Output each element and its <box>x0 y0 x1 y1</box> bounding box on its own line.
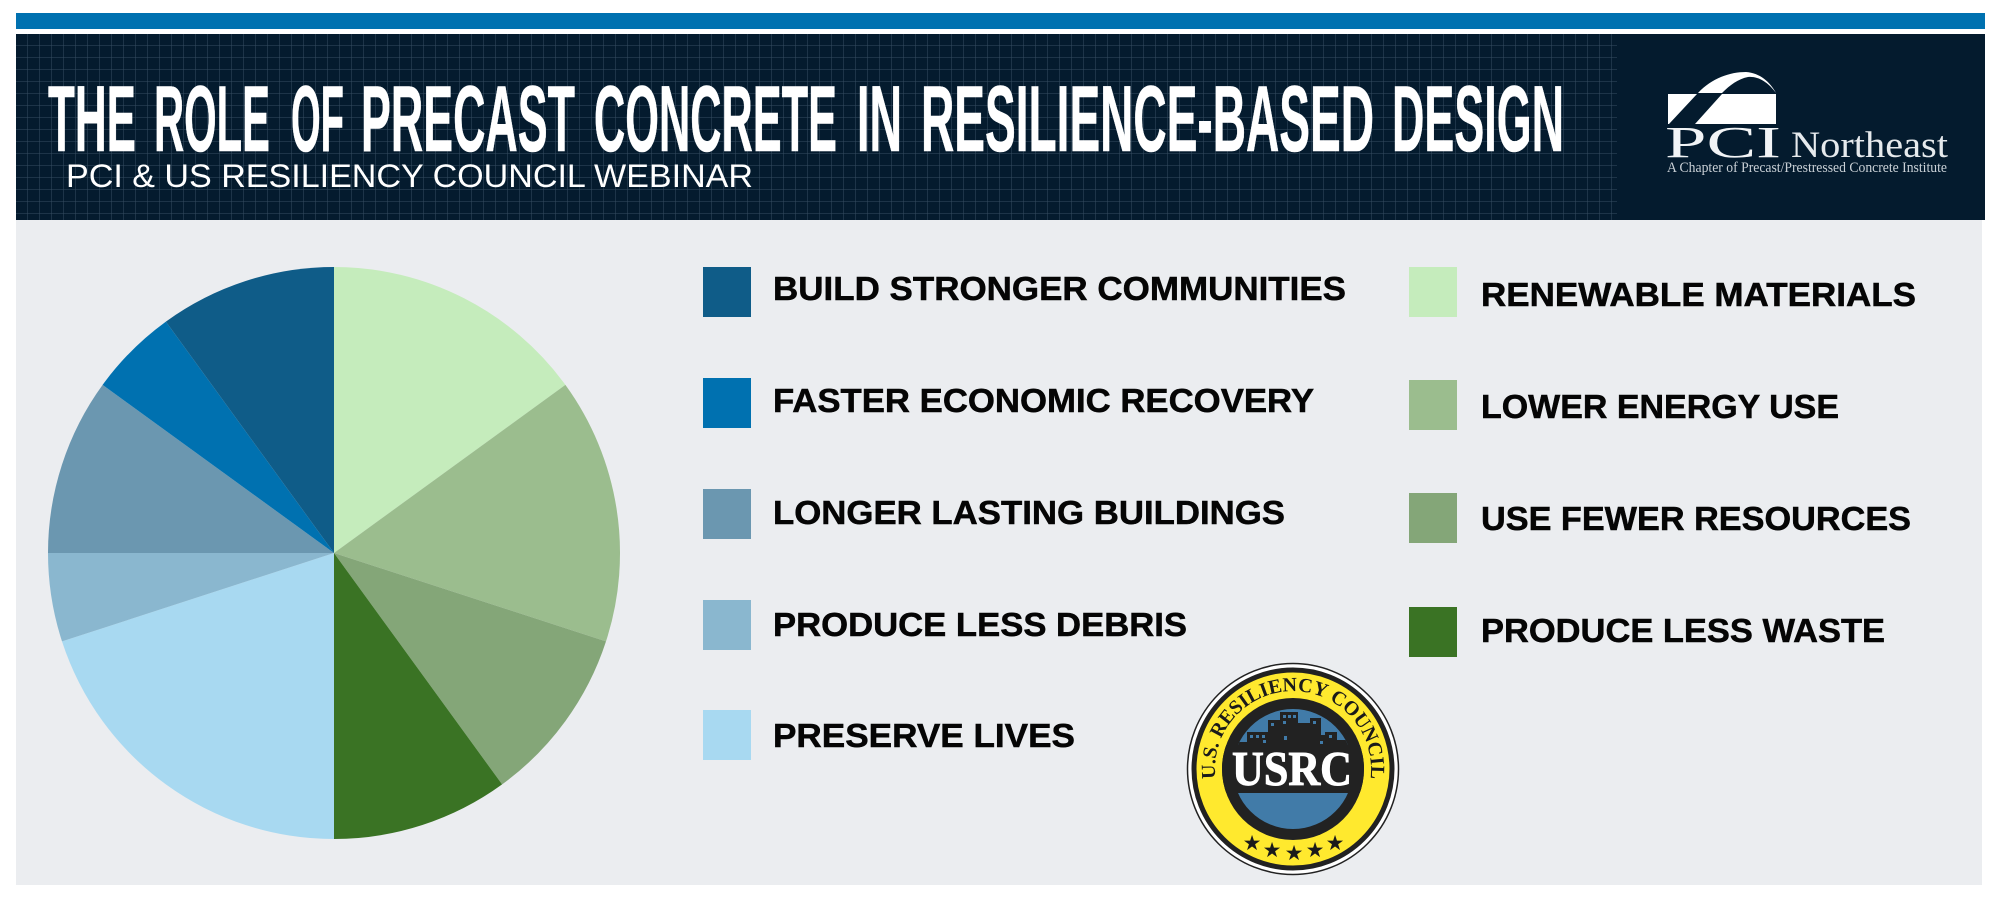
legend item: produce less debris: PRODUCE LESS DEBRIS <box>773 606 1187 643</box>
seal stars: ★ <box>1285 841 1303 865</box>
slice: longer lasting buildings 10% <box>48 385 334 553</box>
title: ROLE <box>154 66 270 171</box>
legend item: produce less waste <box>1409 607 1885 657</box>
slice: use fewer resources 10% <box>334 553 606 784</box>
title: CONCRETE <box>594 66 837 171</box>
seal stars: ★ <box>1326 831 1344 855</box>
slice: faster economic recovery 5% <box>103 322 334 553</box>
legend item: use fewer resources: USE FEWER RESOURCES <box>1481 500 1911 537</box>
legend item: preserve lives: PRESERVE LIVES <box>773 717 1075 754</box>
slice: produce less waste 10% <box>334 553 502 839</box>
logo: PCI Northeast: Northeast <box>1791 125 1949 166</box>
legend item: longer lasting buildings <box>703 489 1285 539</box>
seal stars: ★ <box>1306 838 1324 862</box>
pie chart <box>48 267 620 839</box>
seal circular text: U.S. RESILIENCY COUNCIL <box>1202 678 1384 779</box>
slice: produce less debris 5% <box>48 553 334 641</box>
logo: PCI Northeast: A Chapter of Precast/Prestressed Concrete Institute <box>1667 160 1947 176</box>
seal stars: ★ <box>1263 838 1281 862</box>
title: PRECAST <box>361 66 575 171</box>
legend item: build stronger communities: BUILD STRONGER COMMUNITIES <box>773 270 1346 307</box>
legend item: renewable materials <box>1409 267 1916 317</box>
legend item: produce less debris <box>703 600 1187 650</box>
logo: USRC seal: USRC <box>1232 741 1352 796</box>
slice: build stronger communities 10% <box>166 267 334 553</box>
header banner: DESIGN <box>1392 66 1564 171</box>
seal stars <box>1243 831 1344 865</box>
logo: PCI Northeast <box>1665 72 1949 176</box>
title: THE <box>48 66 136 171</box>
legend item: build stronger communities <box>703 267 1346 317</box>
legend item: lower energy use <box>1409 380 1839 430</box>
logo: PCI Northeast: PCI <box>1665 118 1781 167</box>
slice: renewable materials 15% <box>334 267 565 553</box>
city skyline <box>1233 712 1350 745</box>
title: OF <box>291 66 344 171</box>
seal stars: ★ <box>1243 831 1261 855</box>
slice: lower energy use 15% <box>334 385 620 641</box>
title: RESILIENCE-BASED <box>921 66 1374 171</box>
title: IN <box>857 66 902 171</box>
subtitle: PCI & US RESILIENCY COUNCIL WEBINAR <box>66 158 753 194</box>
slice: preserve lives 20% <box>62 553 334 839</box>
header banner <box>16 34 1985 220</box>
legend item: faster economic recovery <box>703 378 1314 428</box>
legend: left column <box>703 267 1346 760</box>
main panel background <box>16 220 1982 885</box>
legend item: produce less waste: PRODUCE LESS WASTE <box>1481 612 1885 649</box>
legend: right column <box>1409 267 1916 657</box>
top blue bar <box>16 13 1985 29</box>
legend item: faster economic recovery: FASTER ECONOMIC RECOVERY <box>773 382 1314 419</box>
legend item: lower energy use: LOWER ENERGY USE <box>1481 388 1839 425</box>
legend item: preserve lives <box>703 710 1075 760</box>
legend item: longer lasting buildings: LONGER LASTING BUILDINGS <box>773 494 1285 531</box>
logo: USRC seal <box>1186 662 1400 876</box>
legend item: renewable materials: RENEWABLE MATERIALS <box>1481 276 1916 313</box>
legend item: use fewer resources <box>1409 493 1911 543</box>
